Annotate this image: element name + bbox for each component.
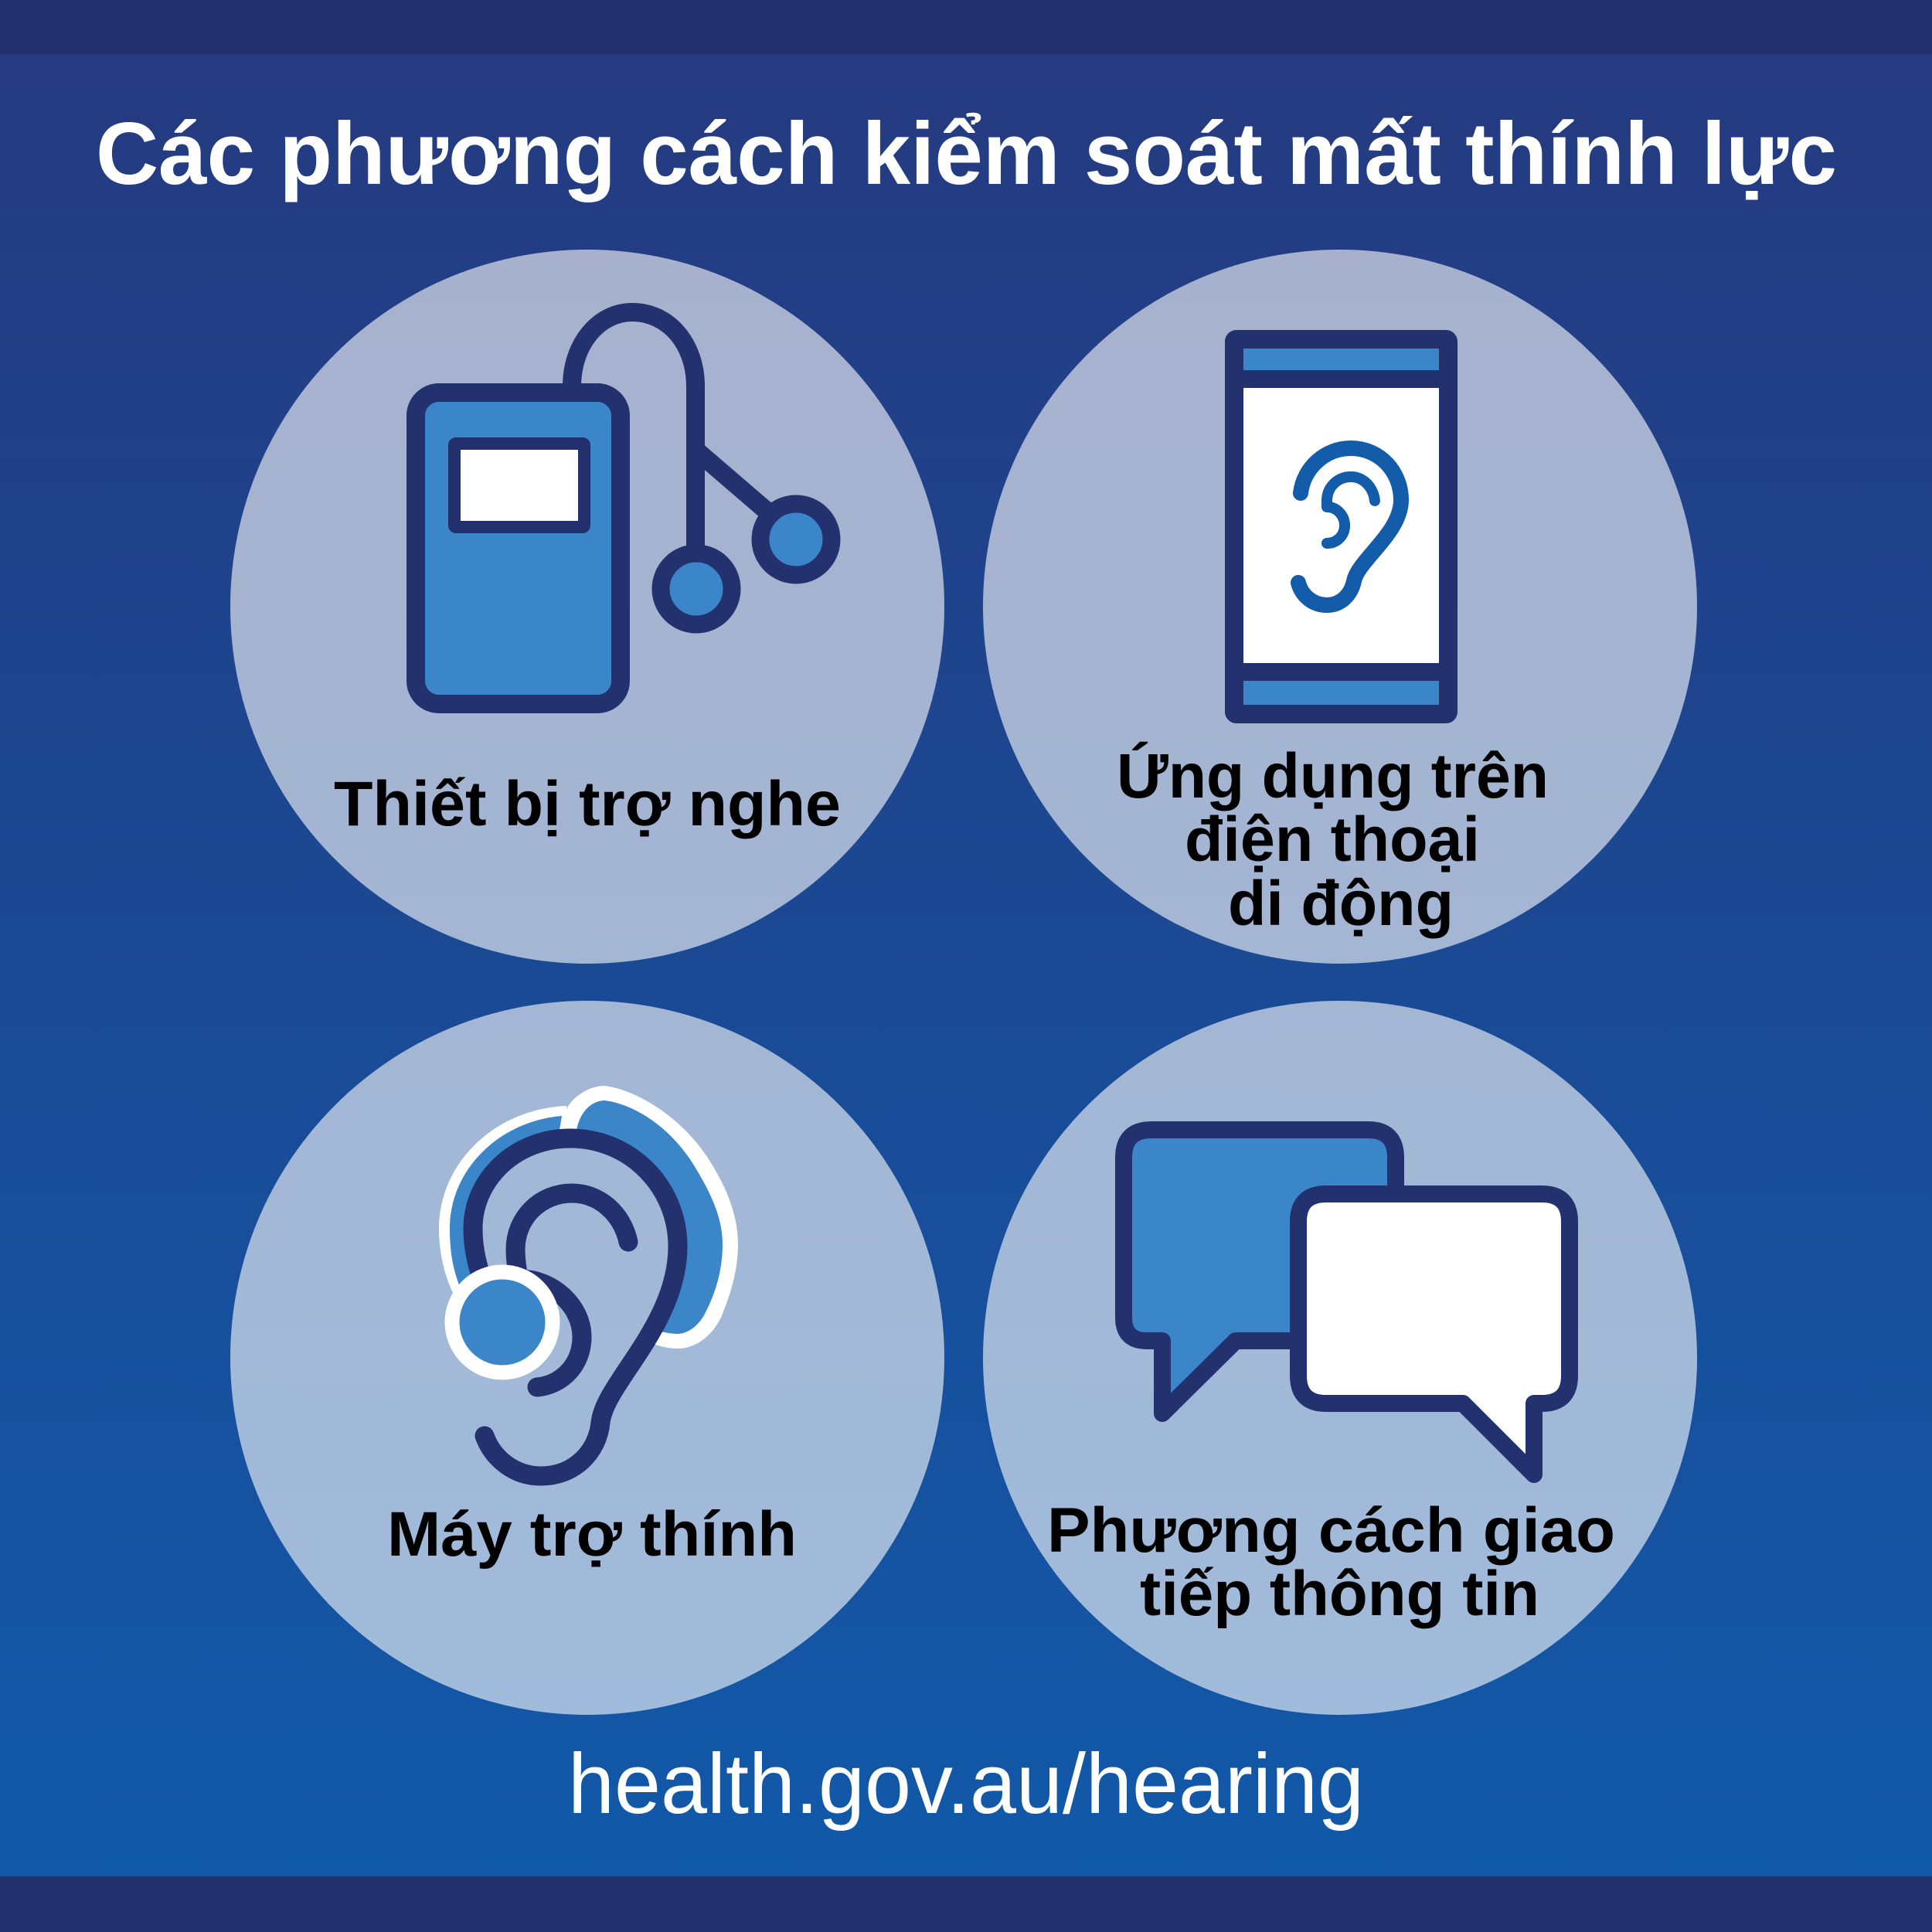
panel: hearing aids — [230, 1001, 944, 1715]
icon: phone with ear — [1234, 339, 1448, 714]
label: communication tactics — [1047, 1495, 1615, 1629]
top band — [0, 0, 1932, 54]
icon: personal amplifier — [416, 312, 832, 704]
label: hearing aids: Máy trợ thính — [387, 1499, 797, 1570]
label: hearing devices: Thiết bị trợ nghe — [334, 769, 841, 839]
label: mobile phone apps — [1117, 741, 1549, 939]
icon: ear with hearing aid — [439, 1086, 738, 1476]
website url: health.gov.au/hearing — [568, 1736, 1364, 1832]
icon: speech bubbles — [1124, 1130, 1570, 1475]
title: Các phương cách kiểm soát mất thính lực — [96, 105, 1837, 203]
label: mobile phone apps: điện thoại — [1185, 804, 1480, 875]
panel: communication tactics — [983, 1001, 1697, 1715]
label: communication tactics: Phương cách giao — [1047, 1495, 1615, 1566]
label: mobile phone apps: di động — [1228, 869, 1454, 939]
panel: mobile phone apps — [983, 250, 1697, 964]
label: mobile phone apps: Ứng dụng trên — [1117, 741, 1549, 811]
bottom band — [0, 1876, 1932, 1932]
panel: hearing devices — [230, 250, 944, 964]
label: communication tactics: tiếp thông tin — [1140, 1559, 1539, 1629]
